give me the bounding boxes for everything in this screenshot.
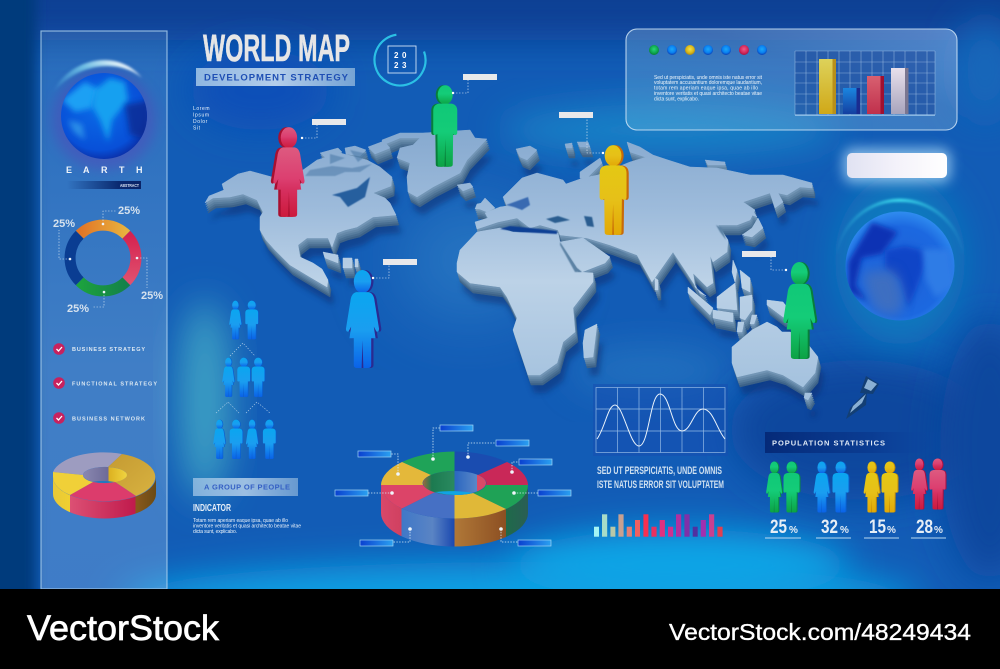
callout blue xyxy=(372,259,417,279)
right globe xyxy=(837,200,963,320)
population group 2: 32 xyxy=(821,517,838,538)
world map xyxy=(205,130,879,419)
population group 4: 28 xyxy=(916,517,933,538)
watermark bar xyxy=(0,589,1000,669)
population group 4: % xyxy=(934,525,943,536)
figure: green man xyxy=(431,74,497,167)
figure: blue woman xyxy=(346,259,417,368)
donut chart: 25% xyxy=(118,205,140,217)
New Zealand xyxy=(846,376,879,419)
people hierarchy xyxy=(213,301,276,459)
line chart caption: ISTE NATUS ERROR SIT VOLUPTATEM xyxy=(597,479,724,491)
population group 1: % xyxy=(789,525,798,536)
earth label xyxy=(66,165,142,175)
small caption: Sit xyxy=(193,126,201,132)
checklist xyxy=(53,343,157,424)
watermark bar: VectorStock.com/48249434 xyxy=(669,619,971,645)
year badge: 20 xyxy=(394,51,410,60)
row 3 xyxy=(213,420,276,459)
column bars xyxy=(594,514,723,537)
row 1 xyxy=(229,301,259,339)
earth label: T xyxy=(119,165,125,175)
abstract bar xyxy=(67,181,141,189)
line chart caption: SED UT PERSPICIATIS, UNDE OMNIS xyxy=(597,465,722,477)
population group 2: % xyxy=(840,525,849,536)
indicator text: dicta sunt, explicabo. xyxy=(193,529,237,535)
watermark bar: VectorStock xyxy=(27,609,220,648)
year badge xyxy=(365,25,435,95)
donut chart xyxy=(53,205,163,315)
3D ring chart large xyxy=(335,425,571,546)
small caption: Ipsum xyxy=(193,112,210,118)
earth label: H xyxy=(136,165,142,175)
line chart xyxy=(593,384,728,456)
earth label: R xyxy=(101,165,108,175)
population group 1: 25 xyxy=(770,517,787,538)
population group 3: 15 xyxy=(869,517,886,538)
panel: top right glass card xyxy=(626,29,957,130)
card text xyxy=(654,75,763,102)
row 2 xyxy=(222,358,265,397)
status dots xyxy=(649,45,767,55)
callout teal xyxy=(742,251,787,271)
group banner: A GROUP OF PEOPLE xyxy=(204,482,290,492)
figure: yellow man xyxy=(559,112,629,235)
population statistics header xyxy=(765,432,947,453)
indicator heading: INDICATOR xyxy=(193,503,232,514)
callout yellow xyxy=(559,112,604,154)
abstract bar: ABSTRACT xyxy=(120,183,139,188)
small caption: Lorem xyxy=(193,106,210,112)
check item 3: BUSINESS NETWORK xyxy=(72,416,145,422)
population group 3: % xyxy=(887,525,896,536)
figure: green woman xyxy=(742,251,817,359)
population group 3 xyxy=(864,462,899,538)
small caption: Dolor xyxy=(193,119,208,125)
card text: totam rem aperiam eaque ipsa, quae ab illo xyxy=(654,86,758,92)
donut chart: 25% xyxy=(141,290,163,302)
line chart caption xyxy=(597,465,724,491)
population group 1 xyxy=(765,462,801,538)
population group 2 xyxy=(814,462,851,538)
check item 2: FUNCTIONAL STRATEGY xyxy=(72,382,157,388)
callout green xyxy=(452,74,497,94)
indicator text: Totam rem aperiam eaque ipsa, quae ab illo xyxy=(193,518,288,524)
title: WORLD MAP xyxy=(203,28,350,70)
indicator text xyxy=(193,518,301,535)
left glass panel xyxy=(41,31,167,589)
donut chart: 25% xyxy=(67,303,89,315)
card text: voluptatem accusantium doloremque laudantium, xyxy=(654,80,762,86)
callout red xyxy=(301,119,346,139)
card text: Sed ut perspiciatis, unde omnis iste natus error sit xyxy=(654,75,763,81)
3D ring chart small xyxy=(53,452,156,518)
earth label: E xyxy=(66,165,72,175)
ring labels xyxy=(335,425,571,546)
population statistics header: POPULATION STATISTICS xyxy=(772,438,885,448)
subtitle banner: DEVELOPMENT STRATEGY xyxy=(204,72,349,84)
small caption xyxy=(193,106,210,132)
white pill xyxy=(843,148,951,183)
population group 4 xyxy=(911,458,946,538)
bar chart xyxy=(795,51,935,116)
panel: left globe xyxy=(52,60,156,170)
subtitle banner xyxy=(196,68,355,86)
card text: inventore veritatis et quasi architecto beatae vitae xyxy=(654,91,762,97)
check item 1: BUSINESS STRATEGY xyxy=(72,347,145,353)
earth label: A xyxy=(83,165,90,175)
card text: dicta sunt, explicabo. xyxy=(654,96,699,102)
figure: red woman xyxy=(271,119,346,217)
donut chart: 25% xyxy=(53,218,75,230)
group banner xyxy=(193,478,298,496)
year badge: 23 xyxy=(394,61,410,70)
indicator text: inventore veritatis et quasi architecto beatae vitae xyxy=(193,524,301,530)
